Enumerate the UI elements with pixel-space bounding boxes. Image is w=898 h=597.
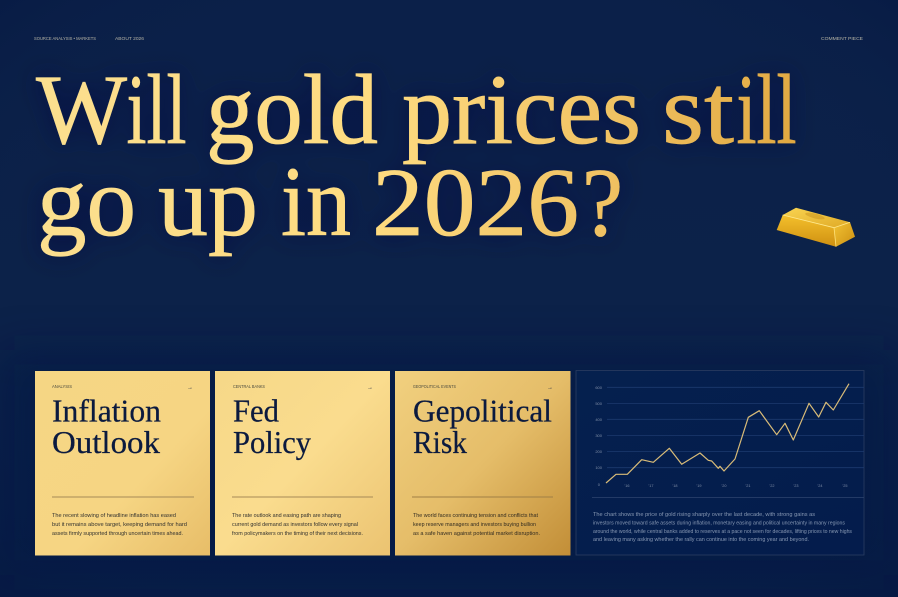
x axis labels: '17 bbox=[649, 484, 653, 488]
arrow: → bbox=[547, 385, 553, 391]
chart caption: investors moved toward safe assets during inflation, monetary easing and political uncertainty in many regions bbox=[593, 520, 845, 526]
x axis labels: '18 bbox=[673, 484, 677, 488]
title: st bbox=[662, 54, 734, 165]
chart caption: and leaving many asking whether the rally can continue into the coming year and beyond. bbox=[593, 537, 809, 543]
card body text bbox=[413, 513, 540, 537]
title: go bbox=[37, 146, 136, 257]
card label: ANALYSIS bbox=[52, 384, 72, 389]
y axis labels: 200 bbox=[595, 449, 603, 454]
y axis labels: 600 bbox=[595, 385, 603, 390]
card heading bbox=[233, 392, 311, 460]
header: left labels: SOURCE ANALYSIS • MARKETS bbox=[34, 36, 96, 41]
card body text: keep reserve managers and investors buying bullion bbox=[413, 522, 536, 528]
card heading: Inflation bbox=[52, 392, 161, 428]
panel: inflation outlook bbox=[35, 371, 210, 556]
card body text: but it remains above target, keeping demand for hard bbox=[52, 522, 187, 528]
title: in bbox=[281, 146, 351, 257]
title: gold bbox=[206, 54, 378, 165]
y axis labels: 100 bbox=[595, 465, 603, 470]
card body text: The rate outlook and easing path are shaping bbox=[232, 513, 341, 519]
card body text: current gold demand as investors follow every signal bbox=[232, 522, 358, 528]
card heading: Policy bbox=[233, 424, 311, 460]
chart grid lines bbox=[607, 387, 864, 468]
card heading bbox=[413, 392, 552, 460]
card heading bbox=[52, 392, 161, 460]
y axis labels: 0 bbox=[598, 482, 601, 487]
card body text bbox=[52, 513, 187, 537]
chart caption: The chart shows the price of gold rising sharply over the last decade, with strong gains as bbox=[593, 512, 815, 518]
card heading: Risk bbox=[413, 424, 467, 460]
icon: gold bar bbox=[777, 208, 855, 247]
x axis labels: '19 bbox=[697, 484, 701, 488]
title: W bbox=[36, 54, 128, 165]
header: right label: COMMENT PIECE bbox=[821, 36, 863, 41]
card body text: as a safe haven against potential market disruption. bbox=[413, 531, 540, 537]
header: left labels bbox=[34, 36, 144, 41]
title: up bbox=[158, 146, 258, 257]
title: prices bbox=[402, 54, 641, 165]
x axis labels: '25 bbox=[843, 484, 847, 488]
x axis labels: '20 bbox=[722, 484, 726, 488]
y axis labels: 400 bbox=[595, 417, 603, 422]
card heading: Outlook bbox=[52, 424, 160, 460]
x axis labels bbox=[625, 484, 847, 488]
card body text: The world faces continuing tension and conflicts that bbox=[413, 513, 538, 519]
chart caption bbox=[593, 512, 852, 543]
title: ill bbox=[126, 54, 186, 165]
card body text bbox=[232, 513, 363, 537]
x axis labels: '22 bbox=[770, 484, 774, 488]
y axis labels: 300 bbox=[595, 433, 603, 438]
card label: CENTRAL BANKS bbox=[233, 384, 265, 389]
title: 2026 bbox=[372, 149, 579, 256]
chart caption: around the world, while central banks added to reserves at a pace not seen for decades, lifting prices to new highs bbox=[593, 529, 852, 535]
title bbox=[36, 54, 796, 257]
panel: geopolitical risk bbox=[395, 371, 570, 556]
y axis labels bbox=[595, 385, 603, 487]
panel: fed policy bbox=[215, 371, 390, 556]
arrow: → bbox=[187, 385, 193, 391]
title: ill bbox=[736, 54, 796, 165]
x axis labels: '21 bbox=[746, 484, 750, 488]
title: ? bbox=[582, 149, 623, 256]
card heading: Fed bbox=[233, 392, 279, 428]
card label: GEOPOLITICAL EVENTS bbox=[413, 384, 456, 389]
card body text: The recent slowing of headline inflation has eased bbox=[52, 513, 176, 519]
x axis labels: '23 bbox=[794, 484, 798, 488]
card body text: from policymakers on the timing of their next decisions. bbox=[232, 531, 363, 537]
y axis labels: 500 bbox=[595, 401, 603, 406]
x axis labels: '24 bbox=[818, 484, 822, 488]
panel: price chart bbox=[576, 370, 864, 555]
header: left labels: ABOUT 2026 bbox=[115, 36, 144, 41]
card heading: Gepolitical bbox=[413, 392, 552, 428]
arrow: → bbox=[367, 385, 373, 391]
card body text: assets firmly supported through uncertain times ahead. bbox=[52, 531, 183, 537]
gold price line bbox=[606, 384, 849, 483]
x axis labels: '16 bbox=[625, 484, 629, 488]
